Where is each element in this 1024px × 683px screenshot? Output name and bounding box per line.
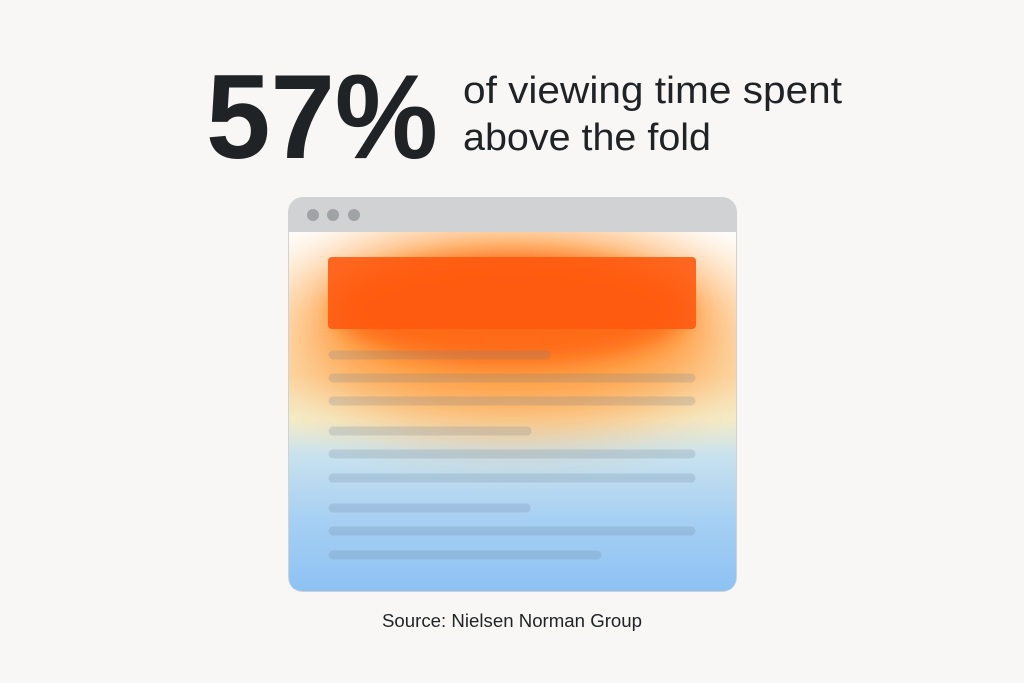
source note: Source: Nielsen Norman Group — [382, 610, 642, 631]
stat description — [463, 70, 842, 159]
hero block — [328, 257, 696, 329]
title bar dots — [307, 209, 360, 221]
browser window heatmap — [288, 197, 737, 592]
big stat 57%: 57% — [206, 50, 438, 184]
heatmap content area — [289, 230, 736, 591]
stat description: above the fold — [463, 117, 711, 159]
stat description: of viewing time spent — [463, 70, 842, 112]
text lines — [333, 355, 691, 555]
headline — [206, 50, 842, 184]
